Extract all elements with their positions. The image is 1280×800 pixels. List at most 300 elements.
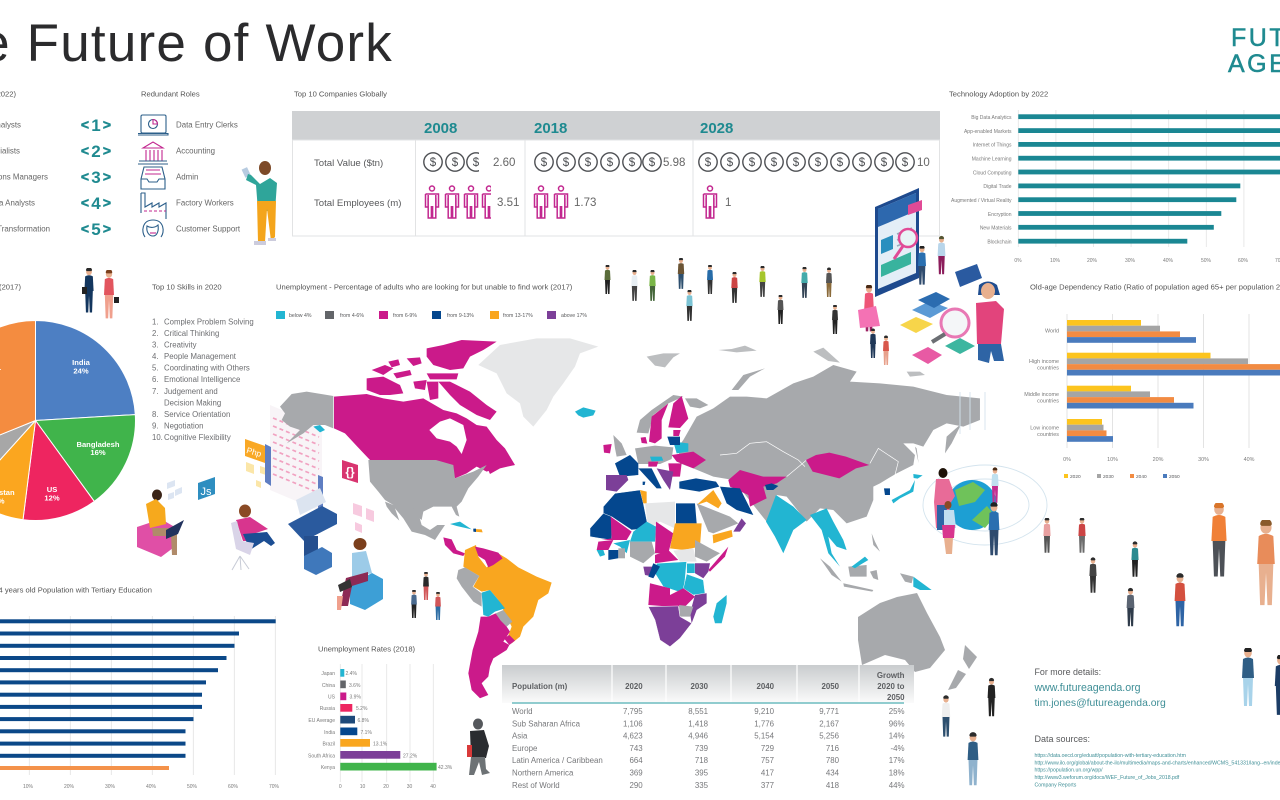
pie labels: 24% <box>73 366 89 376</box>
iraq and jordan <box>697 490 722 508</box>
axis labels: 40 <box>430 784 436 790</box>
year headings: 2028 <box>700 120 733 137</box>
legend: 2020 <box>1070 474 1081 480</box>
heading: unemployment rates: Unemployment Rates (2018) <box>318 644 416 654</box>
turkey <box>679 478 719 492</box>
pie labels: Bangladesh <box>76 440 120 449</box>
axis labels: 20% <box>1153 457 1164 463</box>
skills list: 3. <box>152 341 159 350</box>
southern africa <box>648 606 692 647</box>
table rows: 7,795 <box>623 707 643 716</box>
map legend: from 9-13% <box>447 313 474 319</box>
table rows: 664 <box>630 756 643 765</box>
table rows: 14% <box>889 732 904 741</box>
row labels: Total Value ($tn) <box>314 158 383 169</box>
table rows: 718 <box>695 756 709 765</box>
panel: emerging roles <box>0 90 111 239</box>
axis labels <box>1063 457 1255 463</box>
panel: population table <box>502 665 914 790</box>
sweden <box>649 403 668 443</box>
list: redundant role names: Factory Workers <box>176 198 234 208</box>
table header labels: 2050 <box>821 682 840 691</box>
year headings: 2018 <box>534 120 567 137</box>
category labels: South Africa <box>308 754 335 760</box>
axis labels: 70% <box>269 784 280 790</box>
legend: 2050 <box>1169 474 1180 480</box>
skills list: 9. <box>152 421 159 430</box>
contact details: www.futureagenda.org <box>1034 682 1141 694</box>
skills list: Emotional Intelligence <box>164 375 240 384</box>
grid lines <box>340 664 433 782</box>
bars: middle income <box>1067 386 1194 408</box>
central america <box>443 537 465 556</box>
yemen <box>713 530 733 543</box>
value labels: 2.4% <box>346 671 357 677</box>
icon: inbox <box>141 167 165 189</box>
list: redundant role names <box>176 120 241 234</box>
north-west africa <box>603 490 648 530</box>
chad <box>655 522 673 553</box>
category labels: countries <box>1037 398 1059 404</box>
central asia <box>728 470 787 507</box>
axis labels: 10% <box>1107 457 1118 463</box>
skills list: Cognitive Flexibility <box>164 433 231 442</box>
table rows: 1,418 <box>688 719 709 728</box>
novaya zemlya <box>732 368 765 390</box>
axis labels: 50% <box>1201 258 1212 264</box>
skills list: Creativity <box>164 341 197 350</box>
axis labels: 0 <box>339 784 342 790</box>
brazil and colombia <box>463 545 552 643</box>
axis labels: 40% <box>1244 457 1255 463</box>
values: 2.60 <box>493 157 515 169</box>
table rows <box>512 707 904 790</box>
rank numbers: > <box>103 194 111 210</box>
category labels: Internet of Things <box>973 143 1012 149</box>
table rows: 5,256 <box>819 732 840 741</box>
value labels: 7.1% <box>360 730 372 736</box>
values: 5.98 <box>663 157 685 169</box>
icon: JS badge: Js <box>200 486 212 498</box>
belarus and baltics <box>650 430 688 461</box>
skills list: 5. <box>152 364 159 373</box>
nigeria <box>630 542 655 563</box>
axis labels: 50% <box>187 784 198 790</box>
pie labels <box>0 358 120 506</box>
skills list: 4. <box>152 352 159 361</box>
axis labels: 30% <box>1125 258 1136 264</box>
table header labels: 2020 to <box>877 682 905 691</box>
illustration: person with tablet <box>242 161 277 245</box>
category labels: World <box>1045 328 1059 334</box>
category labels <box>951 115 1012 246</box>
grid lines <box>1067 314 1249 448</box>
axis labels: 60% <box>1238 258 1249 264</box>
south korea <box>884 488 890 495</box>
drc <box>655 562 687 593</box>
rank numbers: 2 <box>91 142 101 161</box>
axis labels <box>339 784 436 790</box>
category labels: India <box>324 730 335 736</box>
niger <box>630 522 656 542</box>
contact details: tim.jones@futureagenda.org <box>1034 698 1166 709</box>
table rows: 335 <box>695 781 709 790</box>
data sources heading: Data sources: <box>1034 734 1090 744</box>
table header labels: Population (m) <box>512 682 568 691</box>
values <box>493 157 930 209</box>
skills list <box>152 318 254 442</box>
values: 1 <box>725 197 731 209</box>
oman <box>733 518 746 532</box>
axis labels: 30 <box>407 784 412 790</box>
skills list: Negotiation <box>164 421 203 430</box>
mali <box>602 517 632 540</box>
axis labels: 10% <box>23 784 34 790</box>
table header labels: 2050 <box>887 693 905 702</box>
venezuela <box>475 547 503 567</box>
rank numbers: > <box>103 220 111 236</box>
table rows: 743 <box>630 744 643 753</box>
table rows: Asia <box>512 732 528 741</box>
skills list: Critical Thinking <box>164 329 219 338</box>
year headings <box>424 120 733 137</box>
category labels <box>308 671 336 771</box>
zambia <box>670 588 695 607</box>
icon: braces badge <box>342 460 374 533</box>
icon: PHP badge <box>245 439 266 488</box>
coins 2028 <box>699 153 914 171</box>
southeast asia <box>810 508 847 567</box>
iran <box>720 487 753 515</box>
madagascar <box>713 595 727 623</box>
eurasia africa map <box>590 346 980 647</box>
pie chart <box>0 320 135 520</box>
list: redundant role names: Admin <box>176 172 198 182</box>
axis labels: 60% <box>228 784 239 790</box>
rank numbers: < <box>81 194 89 210</box>
category labels <box>1024 328 1059 438</box>
category labels: Brazil <box>322 742 335 748</box>
map legend: below 4% <box>289 313 312 319</box>
pie labels: 16% <box>90 448 106 457</box>
legend: 2030 <box>1103 474 1114 480</box>
panel: youth population pie <box>0 282 135 520</box>
axis labels: 10 <box>360 784 365 790</box>
table rows: 1,106 <box>623 719 643 728</box>
category labels: Machine Learning <box>972 156 1012 162</box>
data sources list <box>1034 753 1280 788</box>
axis labels: 0% <box>1014 258 1022 264</box>
table rows: 739 <box>695 744 709 753</box>
table rows: 4,946 <box>688 732 709 741</box>
list: emerging roles names <box>0 120 50 234</box>
panel: contact and sources <box>1034 667 1280 788</box>
mexico <box>385 502 445 540</box>
axis labels: 40% <box>1163 258 1174 264</box>
table rows: 369 <box>630 768 643 778</box>
data sources list: http://www3.weforum.org/docs/WEF_Future_of_Jobs_2018.pdf <box>1034 775 1180 781</box>
illustration: businessman <box>467 718 490 775</box>
category labels: Russia <box>320 706 335 712</box>
category labels: Blockchain <box>987 240 1012 246</box>
border lines <box>720 442 898 477</box>
skills list: 8. <box>152 410 159 419</box>
table header labels <box>512 671 905 702</box>
employee icons <box>426 184 716 220</box>
icon: support face <box>143 220 163 237</box>
india <box>766 495 807 553</box>
canadian arctic islands <box>367 340 515 474</box>
pie labels: US <box>47 485 57 494</box>
uruguay <box>504 635 515 645</box>
table rows: 729 <box>761 744 775 753</box>
tajikistan <box>765 483 778 490</box>
value labels: 13.1% <box>373 742 388 748</box>
denmark <box>641 437 647 444</box>
panel: old-age dependency <box>1024 282 1280 480</box>
legend: 2040 <box>1136 474 1147 480</box>
skills list: 6. <box>152 375 159 384</box>
values: 10 <box>917 157 930 169</box>
bars <box>0 619 276 770</box>
category labels: Middle income <box>1024 392 1059 398</box>
mozambique <box>690 593 707 623</box>
list: redundant role names: Accounting <box>176 146 215 156</box>
category labels: Kenya <box>321 765 335 771</box>
rank numbers <box>81 116 111 239</box>
legend <box>1064 474 1180 480</box>
norway <box>637 395 683 433</box>
kola <box>685 398 708 408</box>
france <box>615 455 638 477</box>
axis labels: 30% <box>105 784 116 790</box>
table rows: 716 <box>826 744 840 753</box>
category labels: App-enabled Markets <box>964 129 1012 135</box>
rank numbers: < <box>81 220 89 236</box>
icon: JS badge <box>167 477 215 500</box>
axis labels: 20 <box>383 784 389 790</box>
table header labels: Growth <box>877 671 905 680</box>
new zealand <box>948 645 977 690</box>
illustration: three small people <box>411 572 441 620</box>
values: 3.51 <box>497 197 519 209</box>
table rows: 1,776 <box>754 719 775 728</box>
table rows: 5,154 <box>754 732 775 741</box>
row labels <box>314 158 401 209</box>
map legend: from 4-6% <box>340 313 364 319</box>
value labels: 27.2% <box>403 754 418 760</box>
paraguay <box>496 610 512 627</box>
south sudan <box>673 548 697 562</box>
skills list: Decision Making <box>164 398 221 407</box>
caribbean <box>450 522 483 532</box>
value labels: 5.2% <box>356 706 368 712</box>
grid lines <box>29 616 275 775</box>
usa <box>368 460 487 520</box>
panel: technology adoption <box>949 90 1280 264</box>
icon: factory <box>141 193 166 219</box>
heading: technology adoption: Technology Adoption by 2022 <box>949 90 1048 98</box>
saudi arabia <box>697 503 738 533</box>
central europe <box>635 446 673 464</box>
table header labels: 2020 <box>625 682 643 691</box>
kenya <box>695 563 710 578</box>
north america map <box>280 338 598 478</box>
rank numbers: 1 <box>91 116 101 135</box>
value labels: 6.8% <box>358 718 369 724</box>
alaska inset <box>313 425 325 432</box>
table header labels: 2040 <box>756 682 775 691</box>
table rows: 377 <box>761 781 774 790</box>
bars <box>340 669 437 770</box>
icon: laptop <box>138 115 168 135</box>
angola <box>648 583 670 607</box>
axis labels: 20% <box>1087 258 1098 264</box>
axis labels: 0% <box>1063 457 1071 463</box>
skills list: Judgement and <box>164 387 218 396</box>
table rows: World <box>512 707 532 716</box>
map legend: above 17% <box>561 313 587 319</box>
americas south map <box>368 460 552 698</box>
row labels: Total Employees (m) <box>314 198 401 209</box>
panel: redundant roles <box>138 90 277 245</box>
category labels: China <box>322 683 335 689</box>
panel: unemployment rates <box>308 644 453 790</box>
category labels: Encryption <box>988 212 1012 218</box>
libya <box>645 502 675 528</box>
panel: top 10 skills <box>152 282 254 442</box>
illustration: globe group <box>923 392 1047 555</box>
logo <box>1228 24 1280 78</box>
icon: PHP badge: Php <box>245 445 263 459</box>
egypt <box>676 503 697 523</box>
category labels: Big Data Analytics <box>971 115 1012 121</box>
greenland <box>478 338 598 427</box>
skills list: 2. <box>152 329 159 338</box>
canada mainland <box>334 394 515 478</box>
table rows: Latin America / Caribbean <box>512 756 603 765</box>
rank numbers: < <box>81 168 89 184</box>
illustration: person on pink cube with laptop <box>137 490 184 557</box>
bars: low income <box>1067 419 1113 442</box>
coins 2008 <box>424 150 488 174</box>
rank numbers: < <box>81 142 89 158</box>
panel: top 10 companies <box>292 90 940 236</box>
skills list: Complex Problem Solving <box>164 318 254 326</box>
illustration: woman on blue cube <box>337 538 383 610</box>
category labels: US <box>328 694 336 700</box>
value labels <box>346 671 453 771</box>
value labels: 3.9% <box>350 694 361 700</box>
table rows: 25% <box>889 707 904 716</box>
balkans <box>657 468 673 490</box>
table rows: 18% <box>889 768 904 778</box>
kamchatka and sakhalin <box>915 423 962 463</box>
arctic islands <box>647 346 925 377</box>
bars: high income <box>1067 353 1280 376</box>
table rows: -4% <box>890 744 904 753</box>
table header labels: 2030 <box>690 682 709 691</box>
skills list: Service Orientation <box>164 410 230 419</box>
heading: top 10 companies: Top 10 Companies Globally <box>294 90 387 98</box>
grid lines <box>1018 110 1244 247</box>
table rows: 290 <box>630 781 643 790</box>
skills list: People Management <box>164 352 237 361</box>
illustration: coder at desk <box>231 488 337 575</box>
ethiopia <box>695 540 720 562</box>
table frame and header <box>292 111 940 236</box>
map legend: from 6-9% <box>393 313 417 319</box>
malaysia and png <box>852 557 932 590</box>
japan <box>892 474 923 503</box>
list: redundant role names: Customer Support <box>176 224 241 234</box>
axis labels: 20% <box>64 784 75 790</box>
iberia <box>606 475 628 492</box>
axis labels <box>1014 258 1280 264</box>
illustration: smartphone with people and cubes <box>858 188 1004 365</box>
rank numbers: > <box>103 142 111 158</box>
icon: bank <box>138 142 168 164</box>
ghana area <box>608 548 625 560</box>
table rows: 780 <box>826 756 840 765</box>
axis labels: 40% <box>146 784 157 790</box>
category labels: Japan <box>321 671 335 677</box>
illustration: small people lower right <box>942 502 1280 785</box>
iceland <box>575 407 596 418</box>
category labels: Digital Trade <box>983 184 1012 190</box>
category labels: countries <box>1037 432 1059 438</box>
table rows: 418 <box>826 781 840 790</box>
data sources list: Company Reports <box>1034 782 1077 788</box>
british isles <box>603 435 627 457</box>
italy <box>638 468 662 488</box>
skills list: 10. <box>152 433 163 442</box>
table rows: 757 <box>761 756 774 765</box>
table rows: 4,623 <box>623 732 643 741</box>
category labels: countries <box>1037 366 1059 372</box>
rank numbers: > <box>103 168 111 184</box>
value labels: 3.6% <box>349 683 361 689</box>
icon: braces badge: {} <box>345 465 355 479</box>
sudan <box>670 523 702 550</box>
axis labels: 30% <box>1198 457 1209 463</box>
table rows: Europe <box>512 744 538 753</box>
heading: redundant roles: Redundant Roles <box>141 90 200 98</box>
category labels: New Materials <box>980 226 1012 232</box>
table rows: Sub Saharan Africa <box>512 719 581 728</box>
category labels: Low income <box>1030 426 1059 432</box>
west africa cyan <box>597 540 630 557</box>
pie labels: 12% <box>44 494 60 502</box>
rank numbers: > <box>103 116 111 132</box>
skills list: 7. <box>152 387 159 396</box>
contact details <box>1034 667 1166 709</box>
car and west coast <box>597 540 678 563</box>
zimbabwe <box>679 605 693 617</box>
australia <box>858 593 945 672</box>
value labels: 42.3% <box>438 765 453 771</box>
rank numbers: < <box>81 116 89 132</box>
table rows: 44% <box>889 781 904 790</box>
west africa navy <box>590 513 612 540</box>
heading: unemployment map: Unemployment - Percentage of adults who are looking for but unable to find work (2017) <box>276 282 573 292</box>
table rows: 9,771 <box>819 707 839 716</box>
rank numbers: 5 <box>91 220 101 239</box>
table rows: Northern America <box>512 768 574 778</box>
ukraine and romania <box>648 452 706 477</box>
list: redundant role names: Data Entry Clerks <box>176 120 238 130</box>
finland <box>668 396 688 428</box>
